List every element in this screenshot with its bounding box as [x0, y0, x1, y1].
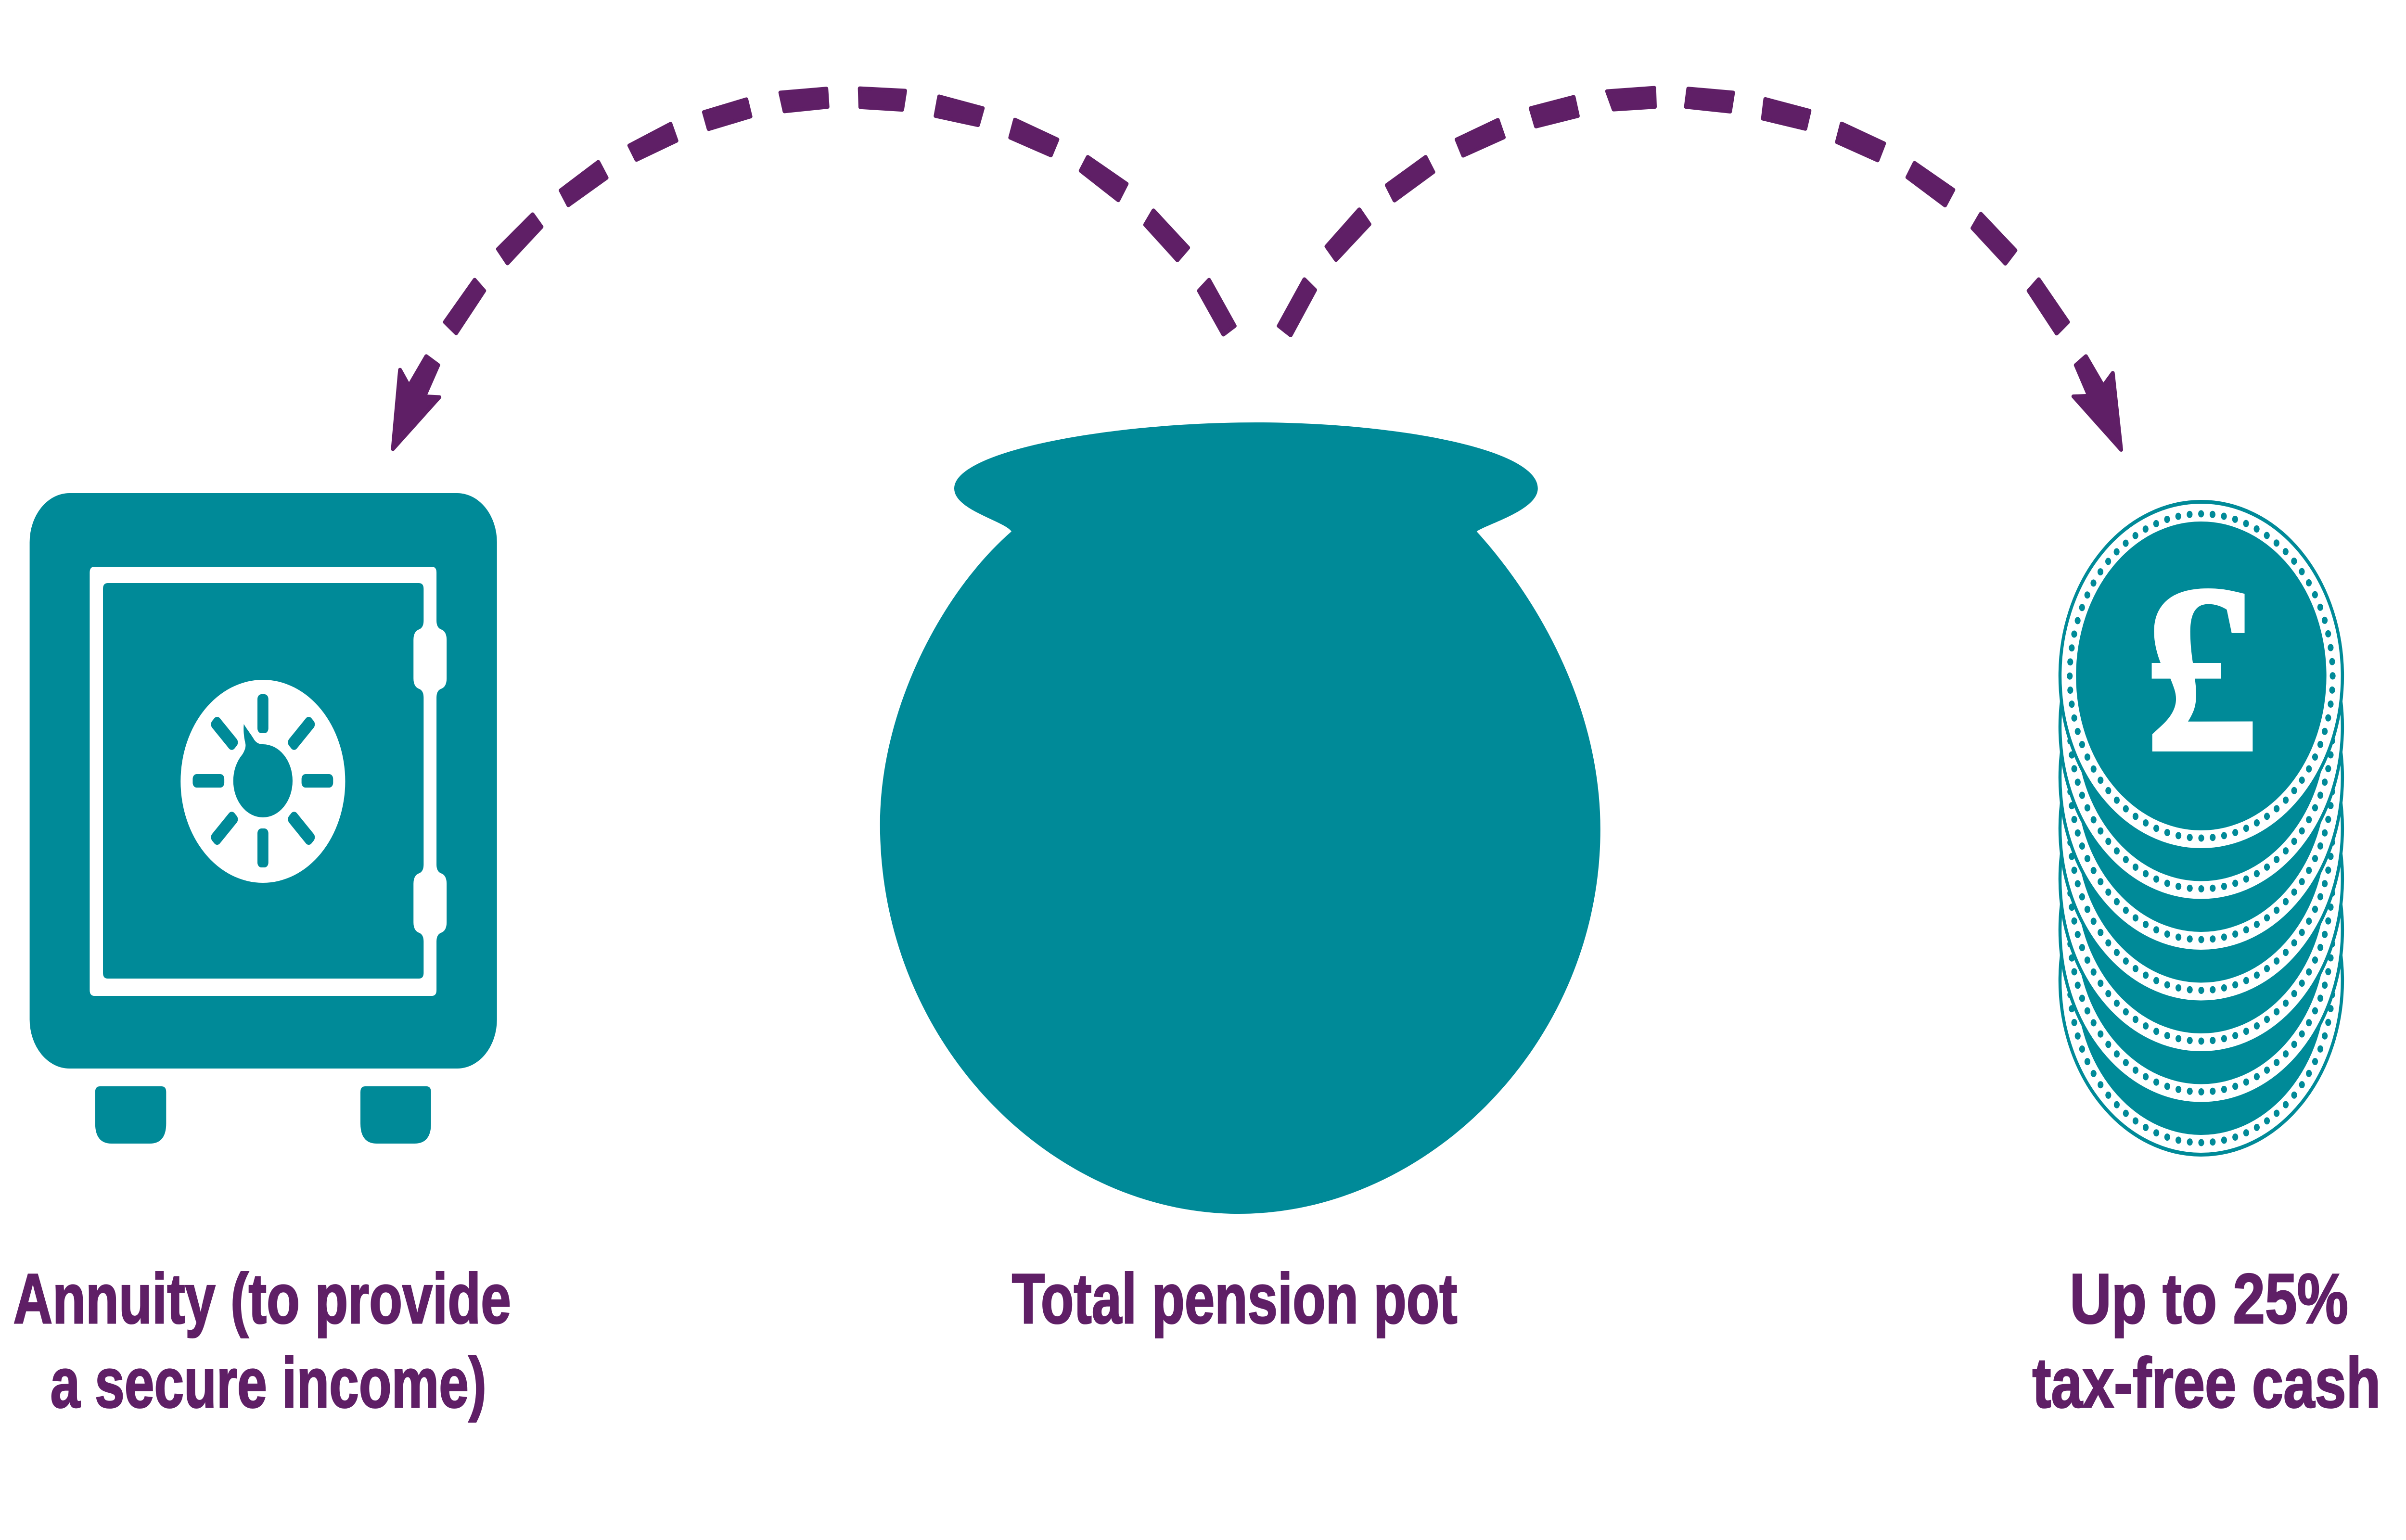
icon: safe	[30, 493, 497, 1144]
safe door frame with hinges	[90, 567, 447, 996]
safe feet	[95, 1086, 431, 1144]
arrow: dashed curve from pot to annuity safe	[393, 89, 1235, 449]
label: annuity: a secure income)	[51, 1344, 486, 1423]
safe door	[103, 583, 423, 979]
pound symbol: £	[2144, 535, 2258, 802]
label: tax-free cash: tax-free cash	[2032, 1344, 2380, 1423]
icon: pension pot	[880, 422, 1600, 1214]
icon: stack of coins	[2060, 502, 2342, 1155]
arrow: dashed curve from pot to tax-free cash	[1279, 88, 2121, 450]
label: annuity	[13, 1260, 511, 1423]
label: annuity: Annuity (to provide	[13, 1260, 511, 1338]
label: tax-free cash	[2032, 1260, 2380, 1423]
safe body	[30, 493, 497, 1069]
combination dial	[180, 680, 345, 883]
label: tax-free cash: Up to 25%	[2070, 1260, 2348, 1338]
label: total pension pot: Total pension pot	[1012, 1260, 1458, 1338]
